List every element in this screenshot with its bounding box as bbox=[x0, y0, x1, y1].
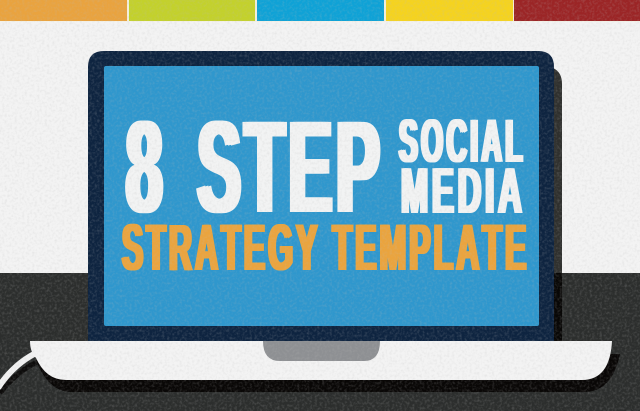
power cable bbox=[0, 354, 37, 393]
laptop base bbox=[30, 341, 612, 380]
background wall bbox=[0, 0, 640, 273]
laptop base shadow bbox=[36, 354, 620, 392]
laptop screen bbox=[104, 66, 539, 326]
title: social: SOCIAL bbox=[399, 107, 526, 175]
title: media: MEDIA bbox=[401, 154, 526, 227]
title: 8 step: 8 STEP bbox=[126, 93, 383, 240]
laptop lid bbox=[88, 51, 554, 341]
trackpad notch bbox=[263, 341, 380, 361]
dark desk bbox=[0, 273, 640, 411]
laptop shadow bbox=[540, 68, 562, 343]
colour bar strip bbox=[0, 0, 640, 22]
title: strategy template: STRATEGY TEMPLATE bbox=[122, 210, 529, 284]
